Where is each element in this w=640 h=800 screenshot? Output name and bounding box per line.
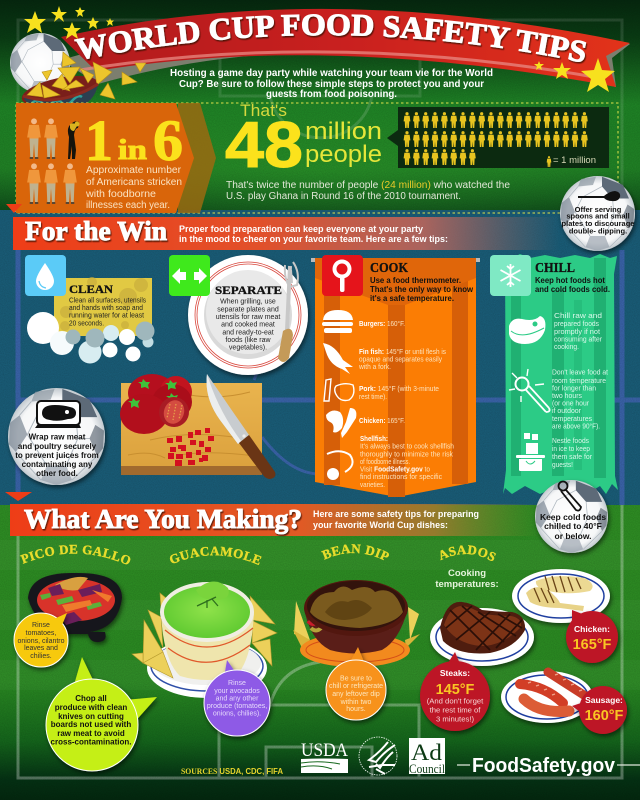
chicken plate: [512, 569, 610, 623]
steak plate: [430, 602, 534, 666]
dish: pico de gallo: chilies.: [30, 653, 52, 660]
tip ball: keep cold foods: or below.: [554, 531, 592, 541]
dish: pico de gallo: Rinse: [32, 622, 50, 629]
tip 2: two hours: [552, 391, 582, 400]
description: Approximate number: [86, 165, 182, 176]
tip 1: [554, 311, 602, 351]
dish: pico de gallo: leaves and: [24, 645, 58, 652]
intro text: [170, 67, 493, 100]
callout: chop all produce: raw meat to avoid: [57, 729, 125, 738]
heading banner: What Are You Making?: [10, 504, 540, 536]
icon: shrimp: [327, 451, 353, 480]
tip ball: wrap raw meat: [8, 388, 105, 485]
body: and cooked meat: [221, 322, 275, 328]
icon: thermometer: [558, 482, 581, 511]
tip 2: if outdoor: [552, 406, 581, 415]
chicken temperature: Chicken:: [574, 624, 610, 634]
description: with foodborne: [85, 189, 156, 200]
icon: food on ice: [516, 433, 545, 471]
heading banner: For the Win: [13, 216, 560, 250]
marker: red corner triangle top: [6, 204, 22, 213]
orange tip bubble: [326, 647, 386, 720]
callout: chop all produce: Chop all: [75, 694, 107, 703]
tip 2: [552, 368, 609, 430]
steak temperature: (And don't forget: [427, 696, 484, 706]
intro text: Cup? Be sure to follow these simple steps to protect you and your: [179, 78, 484, 90]
shellfish: thoroughly to minimize the risk: [360, 450, 453, 458]
nacho chips: [27, 52, 146, 99]
tip 2: temperatures: [552, 414, 592, 423]
tip 1: cooking.: [554, 342, 579, 351]
cooking temperatures label: [435, 568, 499, 590]
chips: [293, 601, 420, 648]
guacamole bowl: [160, 581, 254, 680]
logo: USDA: [301, 740, 348, 773]
body: utensils for raw meat: [216, 314, 280, 321]
comparison text: [226, 180, 510, 202]
website: FoodSafety.gov: [472, 754, 616, 777]
body: 20 seconds.: [69, 318, 104, 328]
people icons: [27, 118, 77, 204]
shellfish: find instructions for specific: [360, 472, 442, 481]
intro: Keep hot foods hot: [535, 276, 605, 285]
legend: [547, 155, 596, 167]
comparison text: U.S. play Ghana in Round 16 of the 2010 tournament.: [226, 191, 461, 202]
statistic: 48 million people: 48: [225, 108, 303, 181]
intro text: guests from food poisoning.: [266, 88, 397, 100]
icon: arrows: [169, 255, 210, 296]
text: Wrap raw meat: [29, 432, 86, 442]
panel: 1 in 6 statistic: [16, 103, 216, 213]
tip ball: serving spoons: double- dipping.: [569, 226, 627, 236]
tip ball: keep cold foods: [535, 480, 608, 553]
chips: [132, 593, 277, 678]
icon: fork: [278, 262, 298, 362]
body: and hands with soap and: [69, 303, 143, 312]
dish: guacamole: [131, 546, 278, 741]
yellow tip bubble: [14, 613, 68, 667]
description: of Americans stricken: [86, 177, 182, 188]
statistic: 48 million people: million: [305, 118, 382, 145]
title text: WORLD CUP FOOD SAFETY TIPS: [74, 14, 588, 64]
pork: [359, 384, 439, 401]
intro: [179, 224, 448, 245]
icon: spoon: [578, 191, 620, 201]
legend: = 1 million: [553, 155, 596, 165]
body: vegetables).: [229, 344, 267, 352]
tomatoes: [120, 374, 193, 434]
shellfish: It's always best to cook shellfish: [360, 442, 454, 450]
body: separate plates and: [217, 306, 279, 314]
tip 3: in ice to keep: [552, 444, 590, 453]
callout: chop all produce: knives on cutting: [58, 712, 124, 721]
1 in 6: in: [118, 134, 147, 166]
pork: rest time).: [359, 392, 387, 401]
statistic: 48 million people: That's: [240, 101, 287, 120]
burgers: Burgers: 160°F.: [359, 319, 405, 328]
title ribbon: [61, 8, 630, 87]
intro: your favorite World Cup dishes:: [313, 520, 448, 531]
icon: thermometer in sun: [509, 369, 550, 412]
tip ball: keep cold foods: chilled to 40°F: [544, 521, 602, 531]
tip 2: Don't leave food at: [552, 368, 609, 376]
yellow sponge: [54, 278, 152, 336]
banner rods: [311, 258, 480, 262]
shellfish: of foodborne illness.: [360, 457, 410, 466]
intro: it's a safe temperature.: [370, 294, 454, 303]
dish: bean dip: chill or refrigerate: [329, 683, 383, 690]
text: to prevent juices from: [15, 451, 99, 460]
steak temperature: 3 minutes!): [436, 714, 474, 724]
dish: bean dip: [293, 544, 420, 726]
callout: chop all produce: boards not used with: [51, 720, 131, 729]
dish: pico de gallo: [12, 544, 130, 672]
plate: [147, 638, 267, 698]
body: foods (like raw: [225, 337, 272, 344]
icon: burger: [322, 310, 353, 333]
fin fish: [358, 347, 446, 371]
tip 1: prepared foods: [554, 319, 599, 328]
body: running water for at least: [69, 310, 145, 320]
1 in 6: 1: [85, 108, 113, 173]
marker: red corner triangle middle: [5, 492, 32, 501]
shellfish: Shellfish:: [360, 434, 388, 443]
heading: What Are You Making?: [24, 504, 302, 534]
sausage temperature: [572, 686, 627, 734]
intro: [535, 276, 610, 294]
tip ball: keep cold foods: Keep cold foods: [540, 512, 606, 522]
icon: water drop: [25, 255, 66, 296]
tip 3: them safe for: [552, 452, 592, 461]
chicken temperature: 165°F: [573, 637, 612, 653]
icon: snowflake: [490, 255, 531, 296]
heading: CHILL: [535, 261, 575, 276]
stars decoration: [24, 6, 615, 92]
green banner: [503, 254, 618, 494]
dish: guacamole: produce (tomatoes,: [207, 703, 267, 710]
steak temperature: 145°F: [436, 682, 475, 698]
molcajete bowl: [28, 573, 122, 642]
panel: clean: [25, 255, 154, 364]
stats panel dotted frame: [16, 103, 618, 213]
intro: [313, 509, 479, 531]
statistic: 48 million people: people: [305, 141, 382, 168]
1 in 6: [85, 108, 183, 173]
heading: CLEAN: [69, 282, 113, 296]
intro text: Hosting a game day party while watching your team vie for the World: [170, 67, 493, 79]
logo: Ad Council: Ad: [411, 740, 443, 765]
intro: Use a food thermometer.: [370, 276, 461, 285]
text: [15, 432, 99, 478]
sausage plate: [501, 671, 593, 723]
bowl: [23, 84, 98, 113]
intro: and cold foods cold.: [535, 285, 610, 294]
soccer ball: [10, 33, 70, 93]
shellfish: [360, 434, 454, 489]
intro: Proper food preparation can keep everyone at your party: [179, 224, 424, 235]
person rows: [404, 112, 588, 165]
dish: bean dip: within two: [340, 699, 371, 706]
tip 2: for longer than: [552, 384, 596, 392]
body: When grilling, use: [220, 298, 276, 306]
heading: COOK: [370, 261, 408, 276]
intro: in the mood to cheer on your favorite team. Here are a few tips:: [179, 234, 448, 245]
tip ball: serving spoons: [560, 176, 635, 251]
purple tip bubble: [204, 660, 270, 736]
comparison text: That's twice the number of people (24 million) who watched the: [226, 180, 510, 191]
steak temperature: [420, 652, 490, 731]
logo: Ad Council: [409, 738, 445, 776]
body: and ready-to-eat: [222, 330, 274, 336]
intro: That's the only way to know: [370, 285, 474, 294]
tip 2: are above 90°F).: [552, 422, 600, 430]
pork: Pork: 145°F (with 3-minute: [359, 384, 439, 393]
dish: bean dip: hours.: [346, 706, 366, 713]
tip 1: Chill raw and: [554, 311, 602, 320]
body: [69, 296, 146, 328]
1 in 6: 6: [153, 108, 183, 173]
shellfish: Visit FoodSafety.gov to: [360, 464, 430, 474]
logo: USDA: USDA: [301, 740, 348, 761]
icon: wrapped meat: [35, 401, 81, 428]
pictogram: 48 people: [387, 107, 609, 168]
description: [85, 165, 182, 211]
dish: bean dip: Be sure to: [340, 676, 372, 682]
tip 3: [552, 436, 592, 469]
icon: pork: [324, 379, 354, 401]
bean dip bowl: [304, 580, 408, 654]
plate: [188, 255, 308, 375]
dish title: ASADOS: [440, 545, 496, 561]
tip 3: Nestle foods: [552, 436, 589, 445]
bowl rim: [19, 70, 101, 112]
tomato half: [155, 393, 193, 431]
logo: HHS: [359, 737, 397, 775]
tip ball: serving spoons: Offer serving: [575, 205, 622, 214]
soccer ball and nacho bowl: [10, 33, 146, 113]
dish title: BEAN DIP: [321, 544, 389, 560]
dish: guacamole: your avocados: [214, 688, 260, 695]
orange plate: [300, 633, 410, 667]
sausage temperature: 160°F: [585, 708, 624, 724]
tip ball: serving spoons: plates to discourage: [562, 219, 634, 228]
intro: [370, 276, 474, 303]
dish: guacamole: Rinse: [228, 680, 246, 687]
icon: raw meat: [509, 316, 545, 344]
body: Clean all surfaces, utensils: [69, 296, 146, 304]
fin fish: Fin fish: 145°F or until flesh is: [359, 347, 446, 356]
fin fish: with a fork.: [358, 362, 391, 371]
shellfish: varieties.: [360, 480, 385, 489]
intro: Here are some safety tips for preparing: [313, 509, 479, 520]
sausage temperature: Sausage:: [585, 695, 623, 705]
dish: bean dip: any leftover dip: [332, 691, 380, 698]
cooking temperatures label: Cooking: [448, 568, 486, 579]
icon: fish: [323, 343, 353, 374]
callout: chop all produce: produce with clean: [55, 703, 127, 712]
icon: chicken: [326, 408, 356, 438]
steak temperature: Steaks:: [440, 668, 470, 678]
cutting board: [121, 383, 262, 466]
cooking temperatures label: temperatures:: [435, 579, 499, 590]
text: and poultry securely: [18, 442, 97, 451]
dish: pico de gallo: onions, cilantro: [17, 638, 65, 645]
icon: thermometer: [322, 255, 363, 296]
sick person icon: [68, 121, 80, 159]
panel: separate: [169, 255, 308, 375]
panel: cook: [311, 255, 480, 497]
heading: For the Win: [25, 216, 167, 246]
dish: guacamole: and any other: [216, 696, 259, 702]
tip 2: room temperature: [552, 376, 606, 385]
chicken: Chicken: 165°F.: [359, 416, 405, 425]
tip 3: guests!: [552, 460, 573, 469]
tip 1: promptly if not: [554, 327, 601, 336]
fin fish: opaque and separates easily: [359, 354, 442, 364]
tip 1: consuming after: [554, 334, 602, 344]
statistic: 48 million people: [225, 101, 382, 181]
dish: guacamole: onions, chilies).: [213, 710, 261, 718]
knife: [207, 374, 275, 479]
tip ball: serving spoons: spoons and small: [566, 212, 630, 220]
callout: chop all produce: cross-contamination.: [51, 738, 131, 746]
description: illnesses each year.: [86, 200, 170, 211]
steak temperature: the rest time of: [430, 706, 481, 714]
tip 2: (or one hour: [552, 398, 589, 408]
callout: chop all produce: [46, 657, 157, 771]
chopped tomato: [167, 428, 214, 466]
soap bubbles: [27, 312, 154, 364]
dish: pico de gallo: tomatoes,: [26, 630, 56, 637]
text: contaminating any: [22, 460, 93, 469]
dish title: GUACAMOLE: [170, 546, 262, 566]
panel: chill: [490, 254, 618, 494]
heading: SEPARATE: [215, 283, 282, 297]
sources: SOURCES USDA, CDC, FIFA: [181, 767, 283, 776]
body: [216, 298, 280, 352]
dish title: PICO DE GALLO: [20, 544, 130, 564]
dish: asados: [419, 545, 631, 738]
chicken temperature: [566, 610, 618, 663]
illustration: cutting board with tomatoes and knife: [120, 374, 275, 479]
text: other food.: [36, 469, 78, 478]
orange banner: [315, 258, 476, 497]
logo: Ad Council: Council: [409, 761, 445, 776]
